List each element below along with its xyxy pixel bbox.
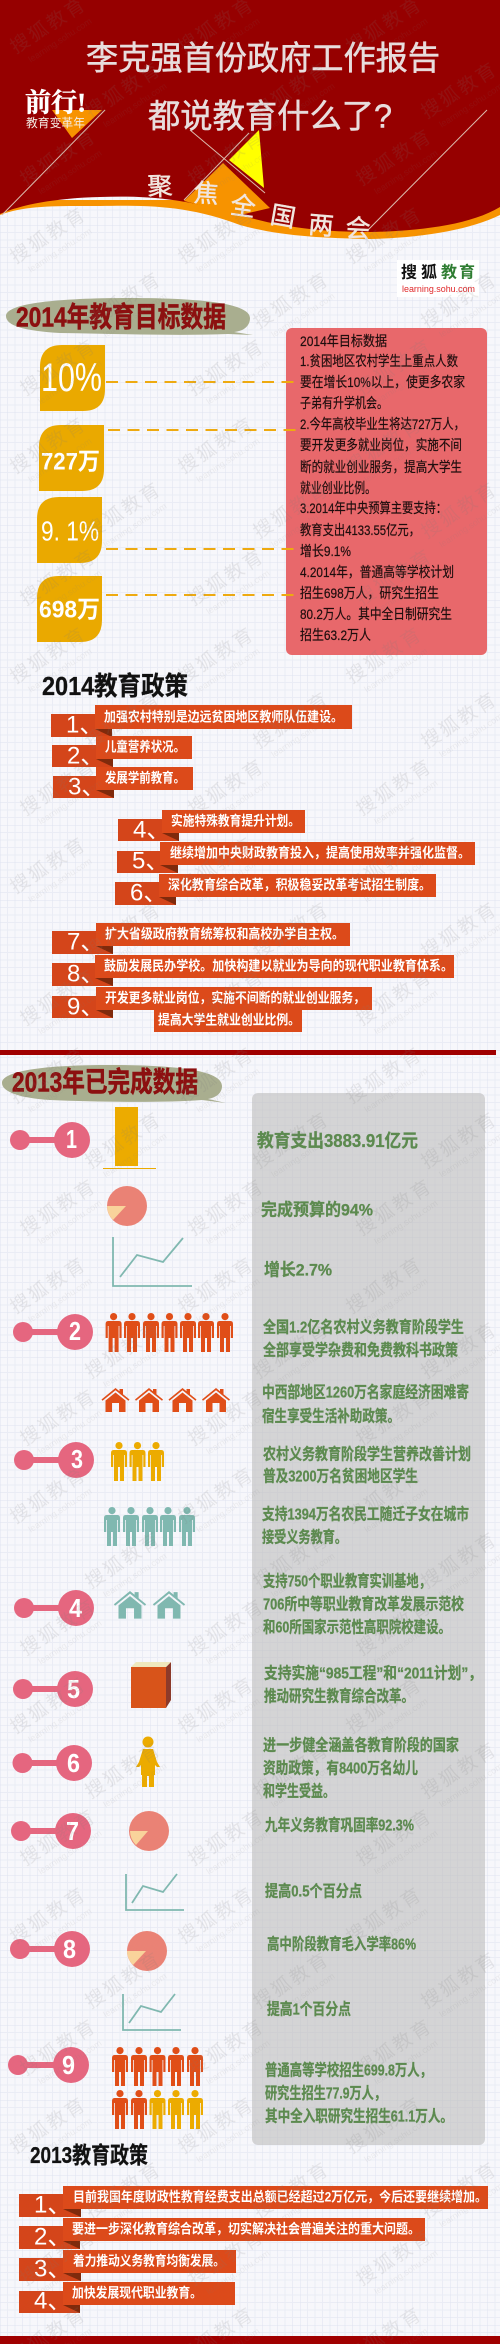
ribbon 2013-1: 1、 — [34, 2192, 71, 2218]
houses: orange row — [102, 1388, 230, 1412]
pin 5: 5 — [67, 1674, 80, 1704]
ribbon 6: 6、 — [130, 880, 167, 906]
text: vocational: 支持750个职业教育实训基地， — [263, 1572, 431, 1590]
subtitle — [147, 173, 371, 244]
stat tile: 10% — [40, 345, 105, 411]
text: vocational: 和60所国家示范性高职院校建设。 — [263, 1618, 451, 1636]
panel: 2014 target text: 教育支出4133.55亿元， — [300, 522, 420, 538]
ribbon 8 — [52, 955, 454, 988]
people: 10 grid — [112, 2047, 203, 2129]
logo: sohu education: 教育 — [441, 262, 475, 282]
text: rural students — [263, 1318, 464, 1360]
text: budget: 完成预算的94% — [261, 1200, 373, 1220]
text: vocational — [263, 1572, 464, 1636]
panel: 2013 results — [252, 1093, 485, 2145]
pin 7 — [11, 1813, 91, 1849]
people: teal row — [104, 1507, 195, 1546]
ribbon 2013-4: 4、 — [34, 2288, 71, 2314]
icon: child — [136, 1736, 160, 1787]
text: admissions: 普通高等学校招生699.8万人， — [265, 2060, 432, 2080]
panel: 2014 target text: 断的就业创业服务，提高大学生 — [300, 459, 462, 475]
pin 6: 6 — [67, 1748, 80, 1778]
title line 2: 都说教育什么了? — [148, 98, 392, 134]
panel: 2014 target text: 1.贫困地区农村学生上重点人数 — [300, 353, 458, 369]
logo: sohu education: 搜狐 — [401, 262, 437, 282]
ribbon 5: 继续增加中央财政教育投入，提高使用效率并强化监督。 — [170, 844, 470, 860]
panel: 2014 target text: 招生63.2万人 — [300, 627, 371, 643]
text: +1: 提高1个百分点 — [267, 2000, 351, 2018]
ribbon 6 — [115, 874, 436, 906]
icon: book — [131, 1662, 171, 1708]
text: aid: 进一步健全涵盖各教育阶段的国家 — [263, 1736, 459, 1754]
yellow triangle — [229, 130, 264, 188]
stat tile: 698万 — [37, 576, 102, 642]
text: migrant children — [262, 1504, 469, 1546]
diagonal lines — [2, 110, 487, 231]
subtitle: 聚 — [147, 173, 173, 201]
text: aid — [263, 1736, 459, 1800]
ribbon 4: 4、 — [133, 816, 170, 844]
people: yellow row — [111, 1442, 164, 1481]
ribbon 9: 提高大学生就业创业比例。 — [158, 1012, 300, 1028]
ribbon 8: 8、 — [67, 960, 104, 988]
stat tile: 698万: 698万 — [39, 596, 100, 624]
pin 5 — [13, 1671, 93, 1707]
small orange triangle — [52, 110, 102, 138]
line chart — [123, 1994, 181, 2030]
panel: 2014 target text: 招生698万人，研究生招生 — [300, 585, 439, 601]
text: aid: 资助政策，有8400万名幼儿 — [263, 1758, 418, 1778]
heading: 2014 policy: 2014教育政策 — [42, 671, 188, 701]
ribbon 5 — [117, 842, 475, 874]
ribbon 1: 1、 — [66, 712, 103, 738]
ribbon 2013-4: 加快发展现代职业教育。 — [72, 2284, 202, 2300]
panel: 2014 target text: 2.今年高校毕业生将达727万人， — [300, 416, 465, 432]
pin 4 — [14, 1590, 94, 1626]
pin 9 — [8, 2047, 89, 2083]
brand mark: 教育变革年 — [26, 115, 85, 130]
pie 92.3% — [129, 1811, 169, 1851]
ribbon 3: 发展学前教育。 — [105, 770, 185, 786]
ribbon 7 — [52, 923, 350, 956]
stat tile: 727万 — [39, 425, 104, 491]
ribbon 2013-2 — [19, 2218, 425, 2250]
stat tile: 10%: 10% — [41, 356, 102, 400]
panel: 2014 target text — [286, 328, 487, 655]
ribbon 9: 9、 — [67, 994, 104, 1020]
ribbon 4 — [118, 810, 305, 844]
ribbon 2: 儿童营养状况。 — [105, 738, 185, 754]
stat tile: 9.1%: 9. 1% — [41, 516, 99, 546]
ribbon 4: 实施特殊教育提升计划。 — [171, 812, 300, 828]
text: nutrition: 普及3200万名贫困地区学生 — [263, 1466, 418, 1486]
pin 8 — [10, 1931, 90, 1967]
heading: 2013 policy: 2013教育政策 — [30, 2142, 148, 2168]
subtitle: 会 — [345, 214, 371, 244]
panel: 2014 target text: 要在增长10%以上，使更多农家 — [300, 374, 465, 390]
pin 2 — [13, 1314, 93, 1350]
text: nutrition — [263, 1444, 471, 1486]
text: enrollment: 高中阶段教育毛入学率86% — [267, 1934, 416, 1954]
ribbon 1: 加强农村特别是边远贫困地区教师队伍建设。 — [104, 708, 343, 724]
pin 6 — [12, 1745, 92, 1781]
stat tile: 727万: 727万 — [41, 448, 100, 476]
ribbon 7: 7、 — [67, 928, 104, 956]
title line 1: 李克强首份政府工作报告 — [86, 40, 440, 76]
panel: 2014 target text: 要开发更多就业岗位，实施不间 — [300, 437, 462, 453]
panel: 2014 target text: 3.2014年中央预算主要支持： — [300, 500, 447, 516]
ribbon 2013-1 — [19, 2186, 488, 2218]
ribbon 7: 扩大省级政府教育统筹权和高校办学自主权。 — [105, 926, 344, 942]
ribbon 3 — [53, 767, 193, 800]
text: aid: 和学生受益。 — [263, 1782, 335, 1800]
panel: 2014 target text: 增长9.1% — [300, 543, 351, 559]
line chart — [113, 1237, 192, 1286]
pie 94% — [107, 1186, 147, 1226]
pin 7: 7 — [66, 1816, 79, 1846]
footer bar — [0, 2336, 500, 2344]
header banner — [0, 0, 500, 244]
pin 3: 3 — [71, 1444, 83, 1474]
ribbon 2013-2: 2、 — [34, 2224, 71, 2250]
logo: sohu education: learning.sohu.com — [402, 284, 475, 294]
text: boarding aid: 宿生享受生活补助政策。 — [262, 1406, 400, 1426]
pin 1: 1 — [66, 1124, 77, 1154]
bar icon — [103, 1107, 156, 1169]
ribbon 1 — [51, 705, 352, 738]
panel: 2014 target text: 子弟有升学机会。 — [300, 395, 388, 411]
houses: teal — [114, 1591, 185, 1619]
ribbon 2013-3 — [19, 2250, 236, 2282]
logo: sohu education — [397, 260, 479, 297]
subtitle: 国 — [268, 201, 298, 233]
text: +0.5: 提高0.5个百分点 — [265, 1882, 362, 1900]
pin 4: 4 — [69, 1593, 82, 1623]
text: migrant children: 接受义务教育。 — [262, 1528, 347, 1546]
ribbon 6: 深化教育综合改革，积极稳妥改革考试招生制度。 — [168, 876, 431, 892]
panel: 2014 target text: 2014年目标数据 — [300, 333, 387, 349]
pin 1 — [10, 1122, 90, 1158]
panel: 2014 target text: 就业创业比例。 — [300, 480, 376, 496]
text: admissions: 研究生招生77.9万人， — [265, 2084, 386, 2102]
panel: 2014 target text: 80.2万人。其中全日制研究生 — [300, 606, 452, 622]
section divider — [0, 1050, 496, 1055]
ribbon 2013-3: 着力推动义务教育均衡发展。 — [73, 2252, 225, 2268]
ribbon 2: 2、 — [67, 742, 104, 770]
line chart — [126, 1874, 184, 1910]
people: orange row — [106, 1313, 233, 1352]
ribbon 2 — [52, 736, 192, 770]
stat tile: 9.1% — [37, 497, 102, 563]
pin 2: 2 — [69, 1316, 81, 1346]
ribbon 8: 鼓励发展民办学校。加快构建以就业为导向的现代职业教育体系。 — [104, 958, 453, 974]
pin 8: 8 — [63, 1934, 76, 1964]
text: 985: 推动研究生教育综合改革。 — [264, 1686, 414, 1706]
section banner: 2013 results: 2013年已完成数据 — [12, 1066, 198, 1098]
pin 9: 9 — [62, 2050, 75, 2080]
panel: 2014 target text: 4.2014年，普通高等学校计划 — [300, 564, 454, 580]
subtitle: 两 — [307, 211, 335, 241]
text: 985 — [264, 1664, 482, 1706]
orange triangle — [184, 163, 270, 215]
text: boarding aid — [262, 1382, 469, 1426]
ribbon 3: 3、 — [68, 774, 105, 800]
brand mark: 前行! — [25, 88, 86, 118]
text: retention: 九年义务教育巩固率92.3% — [265, 1816, 414, 1834]
section banner: 2014 targets: 2014年教育目标数据 — [16, 302, 226, 332]
ribbon 2013-2: 要进一步深化教育综合改革，切实解决社会普遍关注的重大问题。 — [72, 2220, 420, 2236]
ribbon 9: 开发更多就业岗位，实施不间断的就业创业服务， — [105, 990, 365, 1006]
dashed connectors — [106, 382, 296, 595]
brand mark — [25, 88, 86, 130]
text: rural students: 全部享受学杂费和免费教科书政策 — [263, 1340, 458, 1360]
text: admissions: 其中全入职研究生招生61.1万人。 — [265, 2106, 453, 2126]
ribbon 2013-4 — [19, 2282, 235, 2314]
subtitle: 全 — [229, 191, 257, 223]
subtitle: 焦 — [193, 179, 219, 209]
pie 86% — [127, 1931, 167, 1971]
ribbon 5: 5、 — [132, 848, 169, 874]
text: spending: 教育支出3883.91亿元 — [257, 1130, 418, 1151]
text: growth: 增长2.7% — [264, 1260, 332, 1280]
text: admissions — [265, 2060, 453, 2126]
pin 3 — [14, 1442, 94, 1478]
ribbon 9 — [52, 987, 372, 1032]
ribbon 2013-3: 3、 — [34, 2256, 71, 2282]
